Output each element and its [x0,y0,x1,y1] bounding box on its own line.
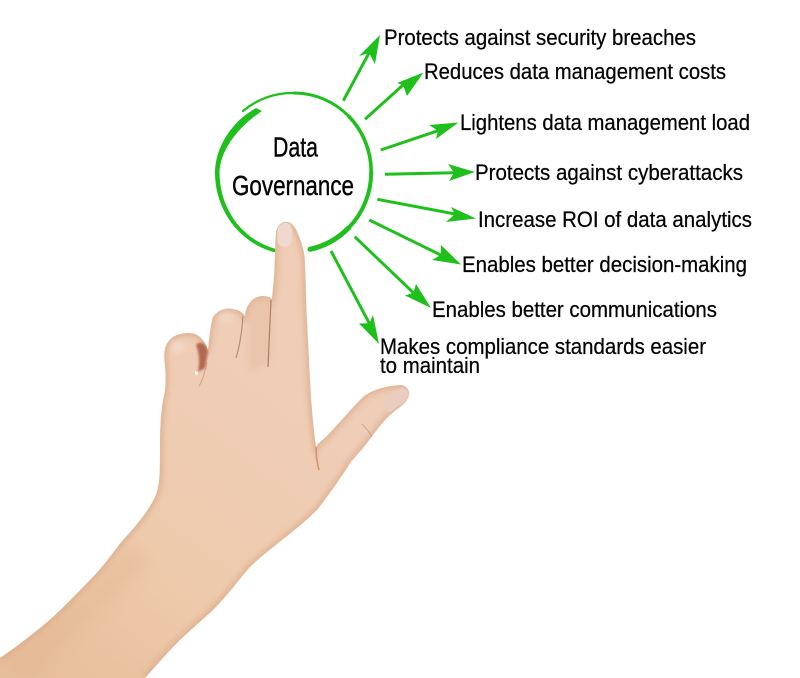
hand and arm [0,222,409,678]
crease: ring and middle finger gap [236,316,243,358]
ring: thick left arc [215,108,278,253]
label 5: Increase ROI of data analytics [478,207,752,232]
label 8: Makes compliance standards easier [380,334,706,359]
arrow 3 [381,122,458,150]
label 8 [380,334,706,378]
heading: Data Governance: Governance [232,170,354,201]
crease: middle and index finger gap [268,300,271,367]
arrows [331,35,476,344]
arrow 4 [385,164,475,181]
forearm upper shadow [104,556,138,592]
label 8: to maintain [380,353,480,378]
heading: Data Governance: Data [273,132,318,162]
label 6: Enables better decision-making [462,252,747,277]
thumbnail [383,388,409,413]
middle finger tone [250,302,270,366]
label 4: Protects against cyberattacks [475,160,743,185]
label 1: Protects against security breaches [384,25,696,50]
edge shadow [0,222,409,678]
finger creases [199,300,372,470]
arrow 2 [365,72,424,119]
arrow 5 [377,199,476,222]
arrow 8 [331,251,379,344]
benefit labels [380,25,752,378]
hand photo [0,222,409,678]
crease: thumb joint [362,424,372,437]
fingernail [277,223,292,247]
label 3: Lightens data management load [460,110,750,135]
arrow 1 [343,35,380,101]
diagram circle [215,93,371,253]
heading: Data Governance [232,132,354,201]
arrow 6 [369,220,461,264]
skin shading [0,222,409,678]
crease: thumb web [316,447,319,470]
pinky gap shadow [196,343,208,372]
crease: ring finger base [199,362,207,386]
label 7: Enables better communications [432,297,717,322]
knuckle highlights [170,341,186,353]
label 2: Reduces data management costs [424,59,726,84]
arrow 7 [355,237,431,308]
ring: thin top arc thickening to the bottom [243,93,371,249]
white gap [195,371,198,375]
